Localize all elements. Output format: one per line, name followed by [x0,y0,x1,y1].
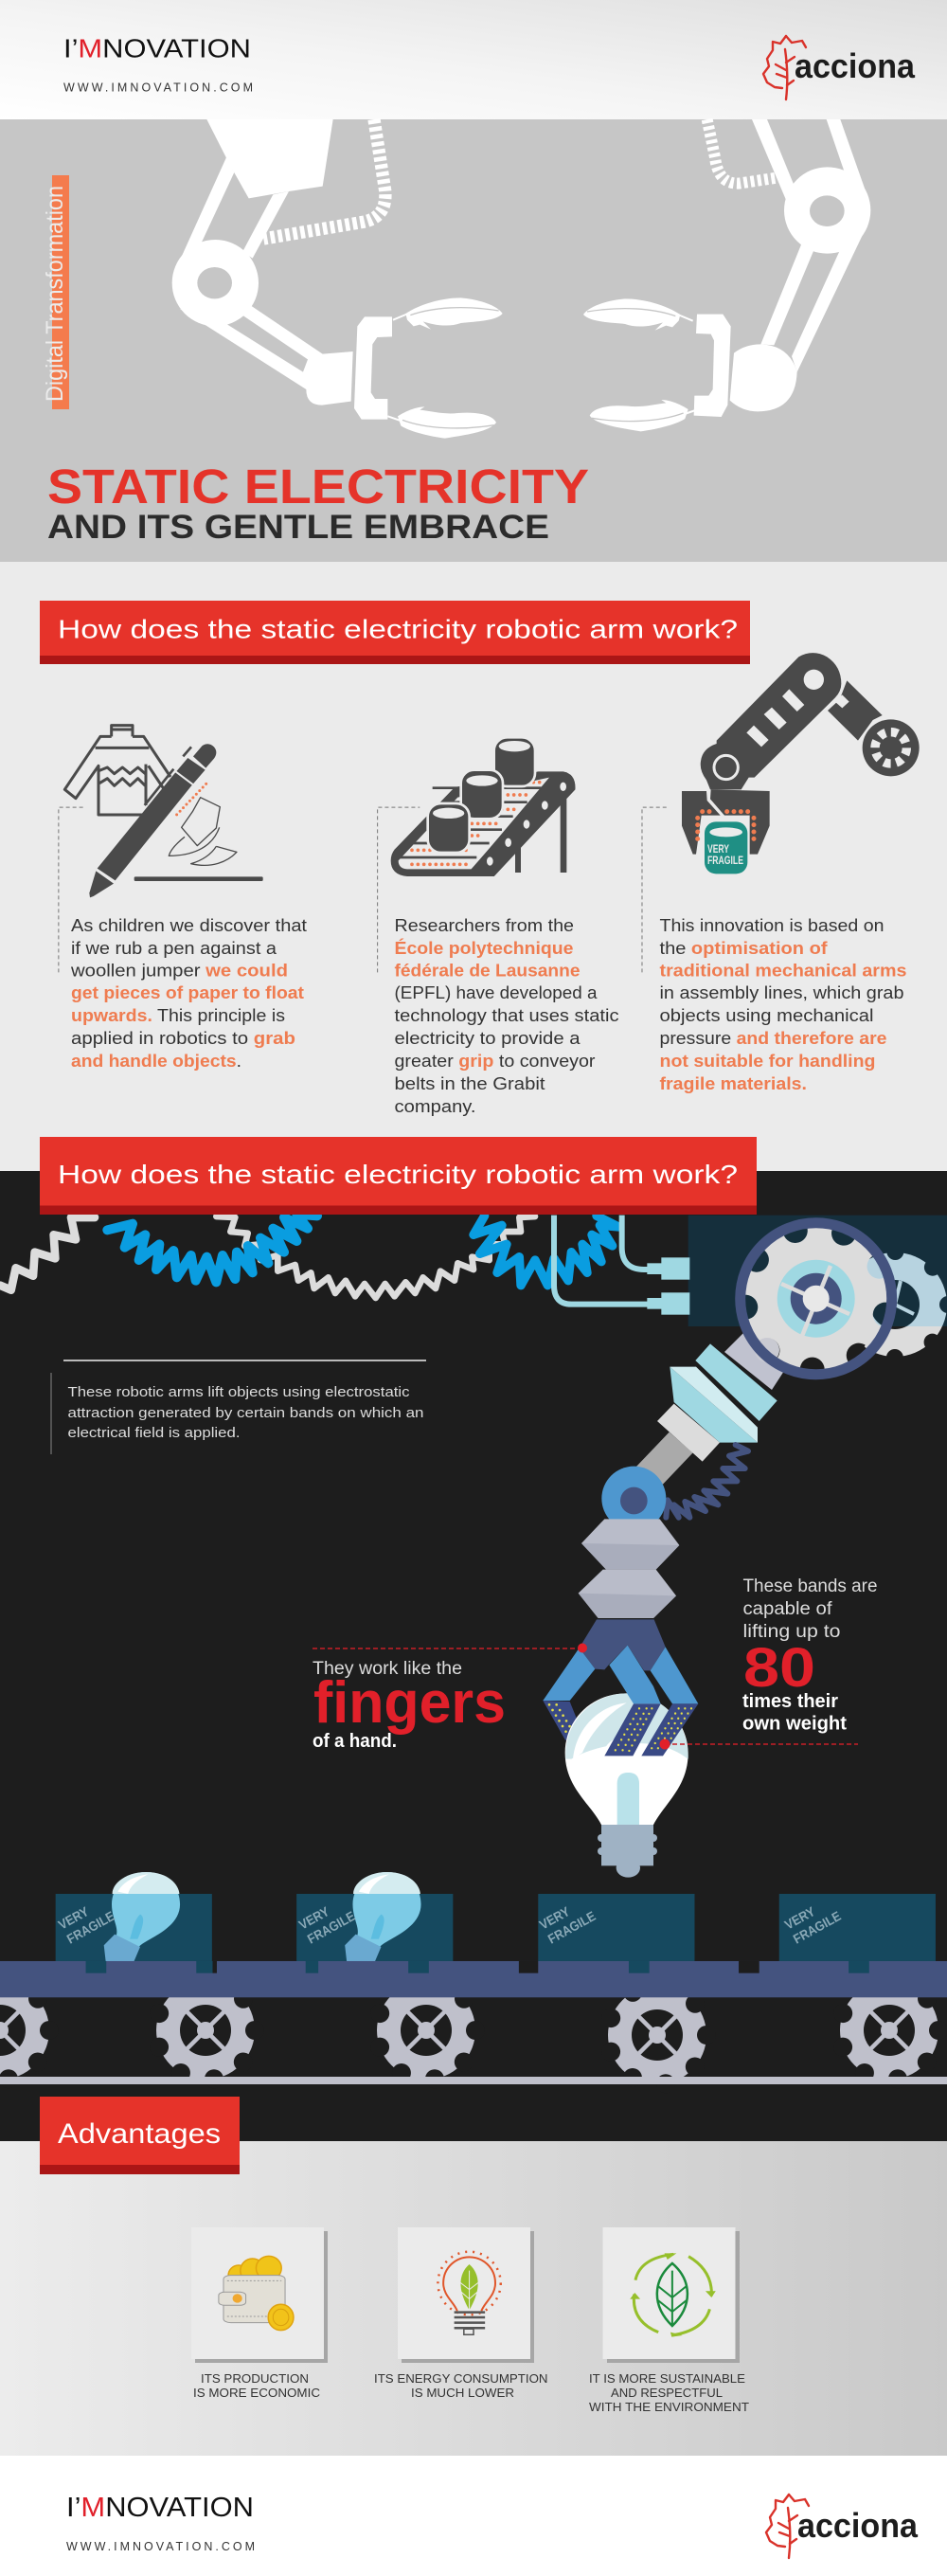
title: STATIC ELECTRICITY [47,459,589,513]
title: AND ITS GENTLE EMBRACE [47,509,549,546]
icon: conveyor belt with cylinders [391,737,575,876]
text block: EPFL researchers: technology that uses static [394,1006,619,1025]
caption: economic: ITS PRODUCTION [201,2372,309,2386]
section heading 1: How does the static electricity robotic arm work? [58,614,738,644]
card: sustainable [602,2227,740,2363]
heading: Advantages [40,2097,240,2174]
hero panel background [0,119,947,562]
callout: 80 times their own weight: times their [742,1691,838,1712]
callout: fingers of a hand: fingers [313,1670,506,1736]
very fragile labels: VERY [537,1903,573,1933]
light bulbs in boxes [104,1872,421,1961]
intro text block: These robotic arms lift objects using electrostatic [68,1385,409,1400]
card: economic production [191,2227,328,2363]
fragile label on cylinder [707,842,743,867]
icon: mechanical arm holding fragile cylinder [682,653,920,874]
acciona logo: acciona [795,46,916,85]
coiled cables [0,1215,618,1298]
I'MNOVATION logo: WWW.IMNOVATION.COM [63,81,253,95]
section background: how it works [0,562,947,1171]
gears under the conveyor [0,1981,947,2084]
boxes on the conveyor [56,1894,936,1961]
illustration: left robotic arm holding feathers [172,119,503,439]
callout: 80 times their own weight: capable of [742,1599,832,1619]
callout: 80 times their own weight: 80 [743,1637,815,1699]
robot arm upper stem [724,1333,784,1390]
text block: mechanical arms: not suitable for handling [659,1052,875,1071]
main gear wheel [741,1223,892,1375]
footer I'MNOVATION logo: I’MNOVATION [66,2493,254,2523]
section heading 1 [40,601,750,664]
callout: fingers of a hand [313,1643,587,1752]
header band [0,0,947,119]
footer background [0,2456,947,2576]
text block: children pen: woollen jumper we could [70,961,288,980]
callout: fingers of a hand: of a hand. [313,1731,397,1752]
I'MNOVATION logo [63,34,253,95]
intro text block [51,1360,426,1454]
callout: 80 times their own weight: lifting up to [742,1622,841,1642]
text block: mechanical arms: the optimisation of [659,939,829,958]
footer acciona logo [766,2495,919,2558]
very fragile labels: FRAGILE [64,1908,117,1947]
caption: energy: ITS ENERGY CONSUMPTION [374,2372,547,2386]
caption: economic [193,2372,320,2400]
footer acciona logo: acciona [797,2506,919,2545]
category tag: Digital Transformation: Digital Transformation [42,186,68,402]
text block: children pen [70,916,307,1071]
text block: mechanical arms: This innovation is based on [659,916,884,935]
icon: pen and woollen jumper [64,726,263,897]
text block: children pen: if we rub a pen against a [71,939,277,958]
secondary gear [864,1252,947,1357]
advantages section background [0,2141,947,2456]
acciona logo [763,36,916,99]
robot arm with joint and bellows [579,1343,777,1618]
very fragile labels: FRAGILE [791,1908,844,1947]
text block: mechanical arms [659,916,907,1093]
motor housing with plugs [554,1216,947,1326]
caption: sustainable: IT IS MORE SUSTAINABLE [589,2372,745,2386]
dashed connectors [59,807,670,972]
footer I'MNOVATION logo: WWW.IMNOVATION.COM [66,2540,255,2553]
text block: EPFL researchers: École polytechnique [394,938,574,958]
very fragile labels: VERY [296,1903,332,1933]
dark section background [0,1171,947,2141]
text block: EPFL researchers [394,916,619,1116]
very fragile labels: VERY [56,1903,92,1933]
gripper hand and light bulb [543,1619,698,1878]
illustration: right robotic arm holding feathers [583,119,870,431]
text block: mechanical arms: traditional mechanical arms [659,961,907,980]
caption: energy [374,2372,547,2400]
fragile label on cylinder: VERY [707,842,729,856]
very fragile labels: FRAGILE [305,1908,358,1947]
text block: children pen: As children we discover that [71,916,307,935]
very fragile labels [56,1903,844,1947]
section heading 2: How does the static electricity robotic arm work? [58,1160,738,1189]
caption: sustainable [589,2372,749,2414]
I'MNOVATION logo: I’MNOVATION [63,34,251,63]
caption: economic: IS MORE ECONOMIC [193,2387,320,2400]
callout: 80 times their own weight: These bands are [742,1576,877,1596]
text block: EPFL researchers: belts in the Grabit [394,1074,545,1093]
text block: children pen: applied in robotics to grab [71,1029,295,1048]
icon: leaf with recycling arrows [630,2253,716,2337]
intro text block: attraction generated by certain bands on which an [68,1406,423,1421]
heading: Advantages: Advantages [58,2118,221,2150]
card: lower energy consumption [398,2227,534,2363]
very fragile labels: FRAGILE [545,1908,599,1947]
text block: mechanical arms: in assembly lines, which grab [659,983,903,1002]
text block: EPFL researchers: electricity to provide a [394,1029,581,1048]
text block: EPFL researchers: fédérale de Lausanne [394,961,580,980]
icon: wallet with coins [219,2256,294,2331]
text block: EPFL researchers: (EPFL) have developed a [394,983,599,1002]
callout: 80 times their own weight: own weight [742,1713,847,1734]
caption: sustainable: AND RESPECTFUL [611,2387,723,2400]
text block: children pen: get pieces of paper to float [71,983,304,1002]
text block: EPFL researchers: greater grip to conveyor [394,1052,595,1071]
fragile label on cylinder: FRAGILE [707,854,743,867]
callout: 80 times their own weight [659,1576,877,1749]
text block: mechanical arms: objects using mechanical [659,1006,873,1025]
caption: energy: IS MUCH LOWER [411,2387,514,2400]
callout: fingers of a hand: They work like the [313,1659,462,1679]
text block: mechanical arms: fragile materials. [659,1074,807,1093]
section heading 2 [40,1137,757,1215]
title [47,459,589,546]
caption: sustainable: WITH THE ENVIRONMENT [589,2401,749,2414]
text block: children pen: and handle objects . [71,1052,241,1071]
text block: EPFL researchers: Researchers from the [394,916,574,935]
text block: mechanical arms: pressure and therefore are [659,1029,886,1048]
footer I'MNOVATION logo [66,2493,255,2553]
conveyor belt [0,1961,947,1997]
text block: EPFL researchers: company. [394,1097,475,1116]
intro text block: electrical field is applied. [68,1426,241,1441]
text block: children pen: upwards. This principle is [71,1006,285,1025]
very fragile labels: VERY [782,1903,818,1933]
icon: bulb with leaf [438,2252,501,2334]
